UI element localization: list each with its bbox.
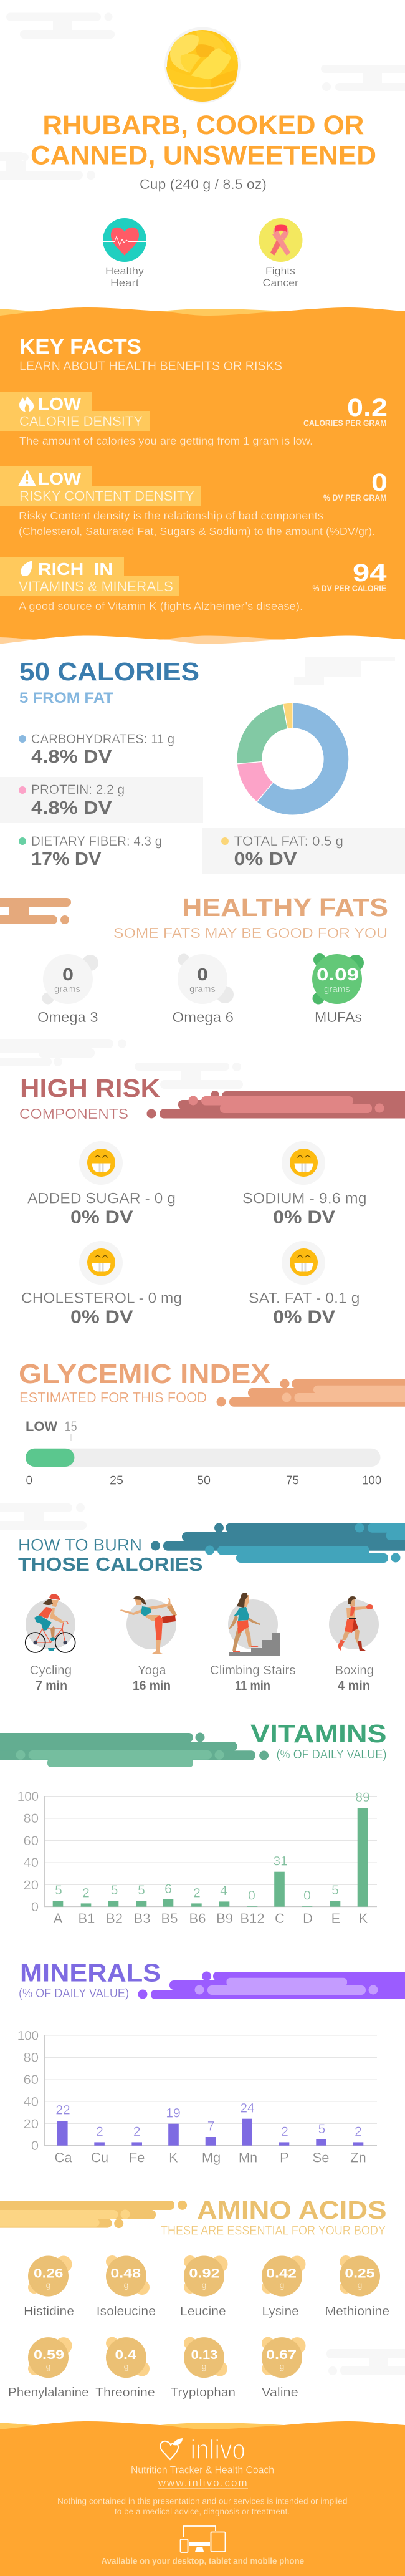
amino acid: tryptophan: [171, 2337, 236, 2400]
label: fights cancer: Fights: [265, 265, 295, 277]
heading: vitamins: (% OF DAILY VALUE): [277, 1748, 386, 1762]
chart: glycemic index gauge: [26, 1419, 381, 1488]
icon: leaf: [21, 561, 32, 576]
label: fights cancer: [263, 265, 298, 289]
risk: added sugar: [27, 1141, 176, 1228]
category labels: B1: [79, 1911, 95, 1926]
chart: glycemic index gauge: 0: [26, 1474, 32, 1488]
amino acid: threonine: 0.4: [115, 2348, 136, 2362]
amino acid: lysine: [262, 2256, 305, 2318]
exercise: boxing: [329, 1596, 379, 1693]
legend: dietary fiber: [19, 834, 162, 869]
panel: footer: [0, 2421, 405, 2576]
icon: cyclist: [26, 1594, 75, 1652]
risk: cholesterol: [21, 1241, 182, 1327]
fat: MUFAs: MUFAs: [315, 1009, 362, 1025]
amino acid: leucine: 0.92: [189, 2267, 220, 2281]
fact: low risky content density: Risky Content density is the relationship of bad components: [19, 509, 323, 522]
exercise: yoga: [120, 1596, 177, 1693]
amino acid: lysine: g: [280, 2280, 284, 2290]
legend: total fat: 0% DV: [234, 849, 297, 869]
value labels: 89: [355, 1790, 370, 1805]
slice: carbohydrates: [257, 703, 349, 815]
bars: [53, 1808, 368, 1907]
value labels: 5: [55, 1883, 62, 1898]
risk: saturated fat: 0% DV: [273, 1307, 336, 1327]
fact: low risky content density: % DV PER GRAM: [323, 493, 386, 503]
category labels: D: [303, 1911, 313, 1926]
icon: warning triangle: [19, 470, 36, 485]
value labels: 2: [355, 2125, 362, 2139]
value labels: 2: [193, 1886, 201, 1901]
heading: 50 calories: [19, 657, 199, 707]
availability note: Available on your desktop, tablet and mobile phone: [101, 2556, 304, 2566]
disclaimer: [57, 2496, 348, 2516]
label: healthy heart: Healthy: [105, 265, 145, 277]
tagline: Nutrition Tracker & Health Coach: [131, 2464, 274, 2476]
legend: total fat: TOTAL FAT: 0.5 g: [234, 834, 343, 849]
disclaimer: to be a medical advice, diagnosis or treatment.: [115, 2506, 290, 2516]
exercise: boxing: 4 min: [338, 1679, 370, 1693]
exercise: yoga: 16 min: [133, 1679, 171, 1693]
fat: omega 3: [37, 954, 98, 1025]
value labels: 7: [207, 2120, 214, 2134]
icon: grin face: [87, 1248, 115, 1276]
chart: calorie donut: [237, 703, 349, 815]
amino acid: threonine: Threonine: [95, 2386, 155, 2400]
heading: healthy fats: SOME FATS MAY BE GOOD FOR YOU: [113, 925, 388, 941]
value labels: 4: [220, 1884, 227, 1898]
risk: sodium: 0% DV: [273, 1208, 336, 1228]
heading: amino acids: [161, 2196, 386, 2238]
slice: fat: [283, 703, 293, 729]
legend: dietary fiber: DIETARY FIBER: 4.3 g: [31, 834, 162, 849]
heading: 50 calories: 50 CALORIES: [19, 657, 199, 686]
disclaimer: Nothing contained in this presentation and our services is intended or implied: [57, 2496, 348, 2506]
y axis labels: 60: [24, 1834, 39, 1848]
y axis labels: 100: [17, 1790, 39, 1804]
fat: omega 3: grams: [54, 984, 80, 995]
amino acid: lysine: 0.42: [266, 2267, 297, 2281]
amino acid: methionine: Methionine: [325, 2305, 389, 2318]
fat: omega 3: Omega 3: [37, 1009, 98, 1025]
chart: glycemic index gauge: 100: [363, 1474, 381, 1488]
risk: cholesterol: 0% DV: [70, 1307, 133, 1327]
fact: rich in vitamins and minerals: VITAMINS & MINERALS: [19, 579, 173, 594]
background cloud: calories: [294, 657, 395, 685]
value labels: 6: [164, 1882, 172, 1896]
category labels: Mg: [202, 2149, 221, 2165]
value labels: [55, 2101, 362, 2139]
grid and axes: [44, 2035, 377, 2146]
fact: low risky content density: RISKY CONTENT DENSITY: [19, 488, 194, 504]
fact: rich in vitamins and minerals: [0, 557, 387, 612]
background cloud: burn: [0, 1503, 87, 1530]
category labels: E: [331, 1911, 340, 1926]
decorative bars: high risk: [147, 1091, 405, 1119]
chart: minerals bar chart: [17, 2029, 377, 2165]
heading: glycemic index: ESTIMATED FOR THIS FOOD: [19, 1389, 207, 1406]
value labels: 22: [55, 2103, 70, 2118]
category labels: Mn: [239, 2149, 257, 2165]
fat: omega 6: [172, 954, 234, 1025]
heading: minerals: MINERALS: [20, 1958, 161, 1987]
value labels: 24: [240, 2101, 255, 2116]
icon: grin face: [290, 1149, 318, 1177]
icon: grin face: [290, 1248, 318, 1276]
amino acid: valine: [262, 2337, 305, 2400]
amino acid: histidine: 0.26: [34, 2267, 64, 2281]
exercise: cycling: [26, 1594, 75, 1693]
y axis labels: 20: [24, 2117, 39, 2131]
fat: MUFAs: 0.09: [317, 965, 359, 984]
legend: carbohydrates: 4.8% DV: [31, 747, 112, 767]
chart: glycemic index gauge: 15: [65, 1419, 77, 1434]
grid and axes: [44, 1796, 377, 1907]
legend: carbohydrates: [19, 732, 174, 767]
chart: vitamins bar chart: [17, 1790, 377, 1926]
heading: healthy fats: HEALTHY FATS: [182, 893, 388, 922]
y axis labels: 60: [24, 2073, 39, 2087]
fact: low risky content density: [0, 466, 388, 538]
title: [31, 111, 376, 171]
heading: high risk: COMPONENTS: [19, 1106, 128, 1122]
legend: carbohydrates: CARBOHYDRATES: 11 g: [31, 732, 174, 746]
icon: fights cancer ribbon: [259, 218, 303, 262]
amino acid: tryptophan: 0.13: [191, 2348, 217, 2362]
amino acid: valine: 0.67: [266, 2348, 297, 2362]
slice: fiber: [237, 703, 288, 764]
exercise: yoga: Yoga: [138, 1664, 166, 1677]
amino acid: isoleucine: g: [124, 2280, 128, 2290]
exercise: boxing: Boxing: [335, 1664, 374, 1677]
decorative bars: amino acids: [0, 2201, 187, 2228]
amino acid: methionine: [325, 2255, 389, 2318]
heading: minerals: [19, 1958, 161, 2000]
background clouds: high risk: [0, 1039, 243, 1089]
risk: sodium: [242, 1141, 367, 1228]
fact: low calorie density: CALORIES PER GRAM: [303, 418, 386, 428]
value labels: 2: [82, 1886, 90, 1901]
category labels: B6: [189, 1911, 206, 1926]
legend: total fat: [202, 828, 405, 874]
fact: low calorie density: LOW: [38, 394, 82, 413]
heading: key facts: [19, 335, 282, 373]
category labels: Ca: [55, 2149, 72, 2165]
heading: key facts: LEARN ABOUT HEALTH BENEFITS OR RISKS: [19, 359, 282, 373]
category labels: [55, 2149, 366, 2165]
category labels: Cu: [91, 2149, 108, 2165]
chart: glycemic index gauge: 25: [110, 1474, 123, 1488]
chart: glycemic index gauge: LOW: [26, 1419, 57, 1434]
y axis labels: [17, 1790, 39, 1914]
value labels: 31: [273, 1855, 288, 1869]
y axis labels: 0: [31, 2139, 39, 2153]
amino acid: tryptophan: Tryptophan: [171, 2386, 236, 2400]
y axis labels: 0: [31, 1900, 39, 1914]
amino acid: leucine: [180, 2255, 228, 2318]
value labels: 5: [138, 1883, 145, 1898]
amino acid: histidine: g: [46, 2280, 50, 2290]
icon: yoga pose: [120, 1596, 177, 1654]
heading: high risk: [19, 1074, 160, 1122]
heading: amino acids: AMINO ACIDS: [197, 2196, 386, 2224]
amino acid: valine: Valine: [262, 2386, 298, 2400]
amino acid: methionine: 0.25: [345, 2267, 375, 2281]
logo: inlivo heart: [160, 2438, 183, 2459]
category labels: P: [280, 2149, 289, 2165]
heading: healthy fats: [113, 893, 388, 941]
wave: [0, 2421, 405, 2440]
heading: glycemic index: GLYCEMIC INDEX: [19, 1359, 270, 1389]
category labels: B5: [161, 1911, 178, 1926]
heading: minerals: (% OF DAILY VALUE): [19, 1987, 129, 2000]
label: fights cancer: Cancer: [263, 277, 298, 289]
fact: low calorie density: 0.2: [347, 394, 388, 422]
icon: healthy heart: [103, 218, 146, 262]
amino acid: histidine: [24, 2256, 74, 2318]
value labels: 2: [133, 2125, 141, 2139]
fact: low calorie density: CALORIE DENSITY: [19, 413, 143, 429]
heading: vitamins: [250, 1719, 386, 1762]
category labels: Se: [313, 2149, 329, 2165]
fat: omega 6: Omega 6: [172, 1009, 234, 1025]
risk: saturated fat: [249, 1241, 360, 1327]
heading: key facts: KEY FACTS: [19, 335, 141, 358]
decorative bars: minerals: [138, 1972, 405, 1999]
value labels: 19: [166, 2106, 181, 2121]
value labels: 2: [96, 2125, 103, 2139]
amino acid: leucine: Leucine: [180, 2305, 226, 2318]
label: healthy heart: Heart: [110, 277, 139, 289]
fact: low risky content density: (Cholesterol, Saturated Fat, Sugars & Sodium) to the amount (%DV/gr).: [19, 525, 375, 538]
amino acid: lysine: Lysine: [262, 2305, 299, 2318]
value labels: 0: [248, 1889, 255, 1903]
category labels: [54, 1911, 368, 1926]
fact: rich in vitamins and minerals: A good source of Vitamin K (fights Alzheimer’s disease).: [19, 600, 303, 612]
food photo: canned rhubarb in a bowl: [164, 27, 241, 104]
amino acid: threonine: [95, 2337, 155, 2400]
title: RHUBARB, COOKED OR: [42, 111, 364, 140]
category labels: B3: [134, 1911, 150, 1926]
website link: www.inlivo.com: [158, 2477, 247, 2489]
amino acid: valine: g: [280, 2361, 284, 2371]
heading: how to burn those calories: [18, 1536, 202, 1575]
y axis labels: 80: [24, 2051, 39, 2065]
wave bottom: [0, 636, 405, 655]
heading: vitamins: VITAMINS: [250, 1719, 386, 1748]
fact: rich in vitamins and minerals: RICH IN: [38, 559, 113, 579]
brand name: inlivo: [191, 2434, 245, 2465]
heading: how to burn those calories: HOW TO BURN: [18, 1536, 142, 1555]
exercise: climbing stairs: 11 min: [235, 1679, 270, 1693]
category labels: B2: [106, 1911, 123, 1926]
value labels: [55, 1790, 370, 1903]
fact: rich in vitamins and minerals: 94: [353, 559, 387, 587]
amino acid: phenylalanine: [8, 2337, 89, 2400]
decorative bars: glycemic index: [217, 1379, 405, 1407]
bars: [57, 2119, 363, 2146]
amino acid: leucine: g: [202, 2280, 206, 2290]
y axis labels: 40: [24, 1856, 39, 1870]
value labels: 5: [318, 2122, 325, 2136]
background clouds: header: [0, 12, 405, 180]
fact: low calorie density: [0, 392, 388, 447]
y axis labels: 40: [24, 2095, 39, 2110]
category labels: A: [54, 1911, 63, 1926]
fat: omega 3: 0: [62, 965, 74, 984]
legend: dietary fiber: 17% DV: [31, 849, 102, 869]
label: healthy heart: [105, 265, 145, 289]
decorative bars: healthy fats: [0, 898, 71, 924]
heading: high risk: HIGH RISK: [20, 1074, 160, 1102]
fact: low risky content density: 0: [371, 469, 388, 496]
category labels: K: [169, 2149, 178, 2165]
legend: protein: PROTEIN: 2.2 g: [31, 783, 125, 797]
y axis labels: [17, 2029, 39, 2153]
value labels: 5: [331, 1883, 339, 1898]
fact: low risky content density: LOW: [38, 469, 82, 488]
amino acid: isoleucine: [97, 2255, 156, 2318]
amino acid: phenylalanine: g: [46, 2361, 50, 2371]
icon: boxer: [338, 1596, 373, 1651]
amino acid: histidine: Histidine: [24, 2305, 74, 2318]
wave top: [0, 307, 405, 326]
category labels: B9: [216, 1911, 233, 1926]
decorative bars: vitamins: [0, 1732, 269, 1767]
icon: woman climbing stairs: [229, 1593, 280, 1656]
category labels: B12: [240, 1911, 265, 1926]
slice: protein: [237, 761, 273, 802]
title: CANNED, UNSWEETENED: [31, 141, 376, 171]
y axis labels: 80: [24, 1811, 39, 1826]
risk: added sugar: ADDED SUGAR - 0 g: [27, 1190, 176, 1207]
icon: flame: [19, 395, 34, 412]
amino acid: phenylalanine: 0.59: [34, 2348, 64, 2362]
fact: rich in vitamins and minerals: % DV PER CALORIE: [313, 584, 386, 593]
icon: grin face: [87, 1149, 115, 1177]
legend: protein: 4.8% DV: [31, 798, 112, 818]
amino acid: isoleucine: 0.48: [110, 2267, 141, 2281]
category labels: Zn: [350, 2149, 366, 2165]
decorative bars: burn calories: [151, 1523, 405, 1563]
chart: glycemic index gauge: 50: [197, 1474, 211, 1488]
heading: amino acids: THESE ARE ESSENTIAL FOR YOUR BODY: [161, 2224, 386, 2238]
amino acid: phenylalanine: Phenylalanine: [8, 2386, 89, 2400]
risk: cholesterol: CHOLESTEROL - 0 mg: [21, 1290, 182, 1306]
icon: devices: [181, 2526, 226, 2552]
fat: MUFAs: [312, 953, 364, 1025]
amino acid: isoleucine: Isoleucine: [97, 2305, 156, 2318]
value labels: 2: [281, 2125, 288, 2139]
category labels: Fe: [129, 2149, 145, 2165]
heading: how to burn those calories: THOSE CALORIES: [18, 1553, 202, 1575]
y axis labels: 20: [24, 1878, 39, 1893]
category labels: K: [359, 1911, 368, 1926]
amino acid: threonine: g: [124, 2361, 128, 2371]
panel: key facts: [0, 307, 405, 655]
chart: glycemic index gauge: 75: [286, 1474, 299, 1488]
serving size: Cup (240 g / 8.5 oz): [140, 176, 267, 192]
value labels: 5: [111, 1883, 118, 1898]
exercise: climbing stairs: Climbing Stairs: [210, 1664, 296, 1677]
value labels: 0: [303, 1889, 311, 1903]
amino acid: tryptophan: g: [202, 2361, 206, 2371]
exercise: cycling: 7 min: [36, 1679, 67, 1693]
heading: 50 calories: 5 FROM FAT: [19, 690, 113, 707]
risk: saturated fat: SAT. FAT - 0.1 g: [249, 1290, 360, 1306]
risk: sodium: SODIUM - 9.6 mg: [242, 1190, 367, 1207]
background cloud: amino acids: [326, 2349, 405, 2375]
y axis labels: 100: [17, 2029, 39, 2043]
fat: MUFAs: grams: [324, 984, 350, 995]
fat: omega 6: 0: [197, 965, 208, 984]
exercise: climbing stairs: [210, 1593, 296, 1693]
risk: added sugar: 0% DV: [70, 1208, 133, 1228]
legend: protein: [0, 777, 203, 823]
fact: low calorie density: The amount of calories you are getting from 1 gram is low.: [19, 435, 313, 447]
category labels: C: [275, 1911, 285, 1926]
exercise: cycling: Cycling: [30, 1664, 72, 1677]
fat: omega 6: grams: [189, 984, 216, 995]
amino acid: methionine: g: [358, 2280, 362, 2290]
heading: glycemic index: [19, 1359, 270, 1406]
